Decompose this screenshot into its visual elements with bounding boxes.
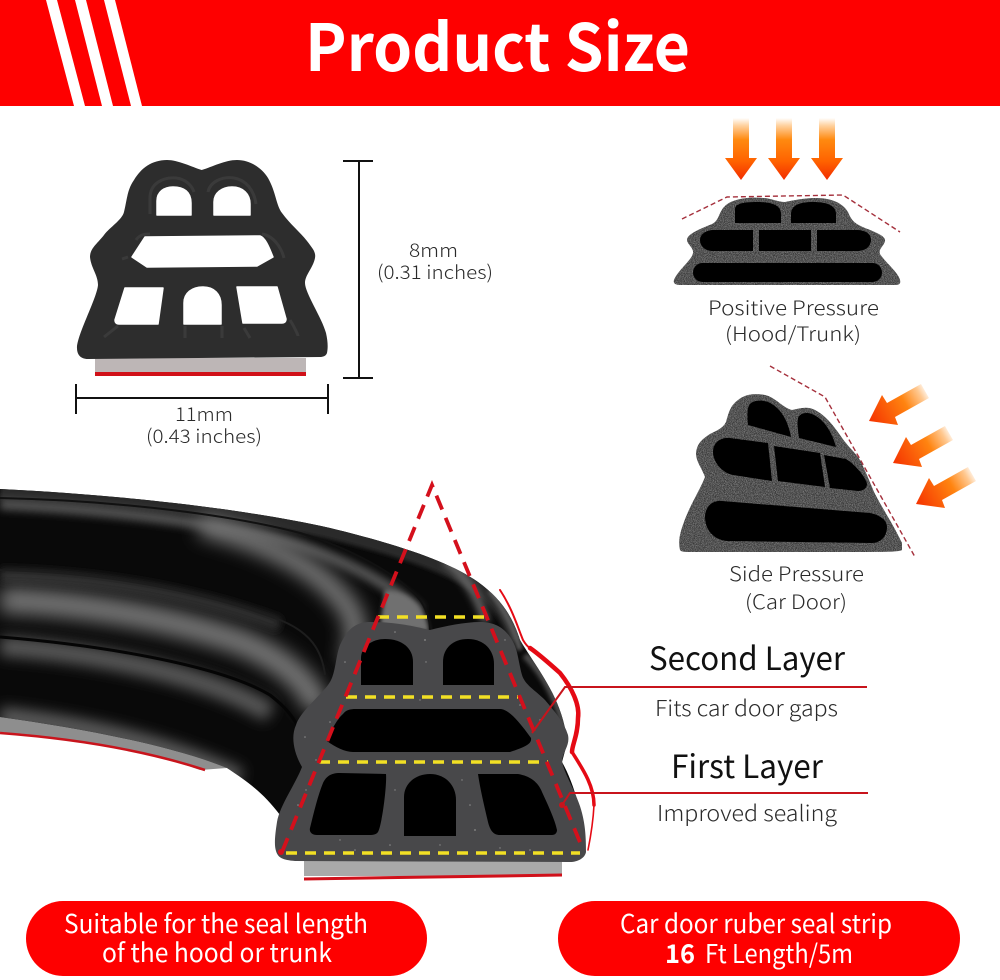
pill: strip length bbox=[558, 901, 960, 976]
first layer heading: First Layer bbox=[671, 742, 824, 788]
small cross-section profile bbox=[77, 160, 328, 376]
side pressure diagram bbox=[679, 366, 976, 615]
coiled seal strip bbox=[0, 489, 576, 814]
pill: hood or trunk: Suitable for the seal length bbox=[64, 904, 368, 941]
icon: downward arrows bbox=[725, 118, 843, 180]
profile under vertical pressure bbox=[674, 198, 900, 285]
positive pressure diagram bbox=[674, 118, 900, 347]
pill: strip length: Ft Length/5m bbox=[705, 934, 853, 971]
pill: hood or trunk bbox=[26, 901, 427, 976]
height label: 8mm bbox=[409, 236, 458, 263]
red contour outline bbox=[500, 590, 594, 850]
width label: 11mm bbox=[175, 400, 233, 427]
width dimension bbox=[76, 384, 328, 449]
pill: strip length: Car door ruber seal strip bbox=[620, 904, 892, 941]
height dimension bbox=[343, 161, 493, 378]
large cross-section profile bbox=[275, 485, 586, 879]
strip base tape bbox=[304, 860, 562, 879]
second layer heading: Second Layer bbox=[649, 634, 846, 680]
positive pressure caption: Positive Pressure bbox=[708, 292, 879, 321]
width label: (0.43 inches) bbox=[146, 422, 262, 449]
second layer description: Fits car door gaps bbox=[655, 691, 838, 723]
pill: hood or trunk: of the hood or trunk bbox=[102, 933, 333, 970]
large profile chambers bbox=[310, 639, 557, 836]
layer guide: yellow dashes bbox=[286, 617, 580, 853]
pressure outline bbox=[682, 195, 900, 232]
positive pressure caption: (Hood/Trunk) bbox=[725, 318, 861, 347]
callout: first layer bbox=[559, 742, 868, 828]
first layer description: Improved sealing bbox=[657, 796, 837, 828]
small profile chambers bbox=[115, 187, 286, 324]
adhesive tape bbox=[95, 358, 306, 376]
header banner bbox=[0, 0, 1000, 106]
pill: strip length: 16 bbox=[665, 934, 695, 971]
side pressure caption: Side Pressure bbox=[729, 558, 864, 587]
side pressure caption: (Car Door) bbox=[745, 586, 847, 615]
header stripes bbox=[46, 0, 142, 106]
pressure outline bbox=[770, 366, 915, 557]
specks bbox=[297, 631, 541, 851]
profile under side pressure bbox=[679, 394, 902, 552]
backing tape bbox=[0, 716, 227, 770]
height label: (0.31 inches) bbox=[377, 258, 493, 285]
layer guide: red dashed triangle bbox=[282, 485, 582, 852]
callout: second layer bbox=[532, 634, 867, 733]
icon: side arrows bbox=[869, 384, 976, 508]
